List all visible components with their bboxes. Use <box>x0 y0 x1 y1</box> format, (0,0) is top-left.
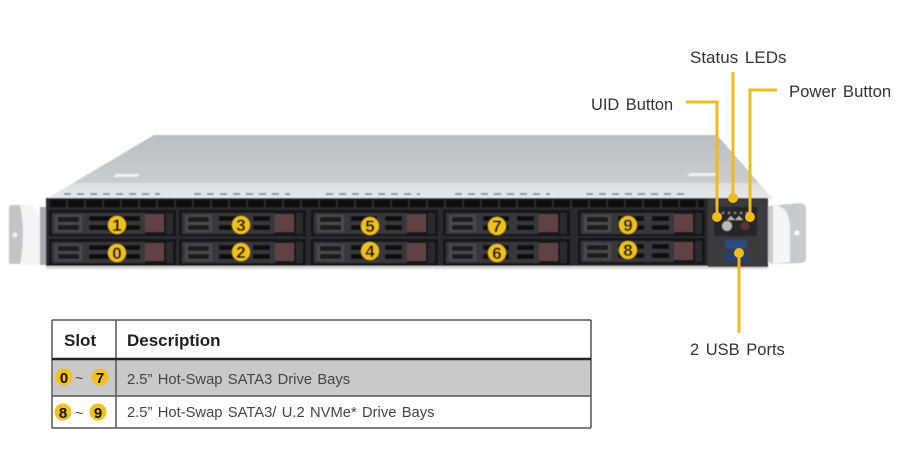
front panel <box>46 198 768 267</box>
row 1 background <box>53 359 591 396</box>
drive bays <box>49 210 705 265</box>
leader: USB Ports <box>736 250 742 333</box>
drive number badges: 8 <box>623 241 633 260</box>
server chassis <box>9 135 806 269</box>
label: Status LEDs: Status LEDs <box>690 48 786 67</box>
drive number badges: 3 <box>236 216 246 235</box>
leader: Status LEDs <box>730 72 736 202</box>
drive number badges: 1 <box>112 216 122 235</box>
cover highlights <box>113 173 719 177</box>
slot table <box>52 320 591 428</box>
drive number badges: 5 <box>365 217 375 236</box>
row 1 slot range: ~ <box>75 370 83 386</box>
drive number badges: 0 <box>112 244 122 263</box>
row 2 slot range: 9 <box>94 405 102 422</box>
row 2 slot range <box>54 404 106 422</box>
row 1 slot range: 0 <box>60 370 68 387</box>
vent row <box>50 200 704 207</box>
drive number badges: 9 <box>623 216 633 235</box>
row 2 slot range: 8 <box>59 405 67 422</box>
row 2 description: 2.5” Hot-Swap SATA3/ U.2 NVMe* Drive Bays <box>127 405 434 421</box>
drive number badges: 6 <box>492 244 502 263</box>
header: Slot: Slot <box>64 331 96 350</box>
row 1 description: 2.5” Hot-Swap SATA3 Drive Bays <box>127 372 350 388</box>
drive number badges: 7 <box>492 217 502 236</box>
right rack ear <box>768 203 806 264</box>
row 2 slot range: ~ <box>75 405 83 421</box>
header: Description: Description <box>127 331 221 350</box>
drive number badges <box>108 216 637 263</box>
chassis top cover <box>46 135 773 199</box>
drive number badges: 2 <box>236 243 246 262</box>
left rack ear <box>9 204 46 265</box>
label: 2 USB Ports: 2 USB Ports <box>690 341 785 359</box>
row 1 slot range: 7 <box>96 370 104 387</box>
leader: UID Button <box>686 102 720 220</box>
cover label ticks <box>64 193 684 195</box>
leader: Power Button <box>746 90 777 220</box>
row 1 slot range <box>56 368 108 387</box>
drive number badges: 4 <box>365 242 375 261</box>
label: UID Button: UID Button <box>591 96 673 114</box>
label: Power Button: Power Button <box>789 82 891 101</box>
control panel <box>708 198 768 267</box>
